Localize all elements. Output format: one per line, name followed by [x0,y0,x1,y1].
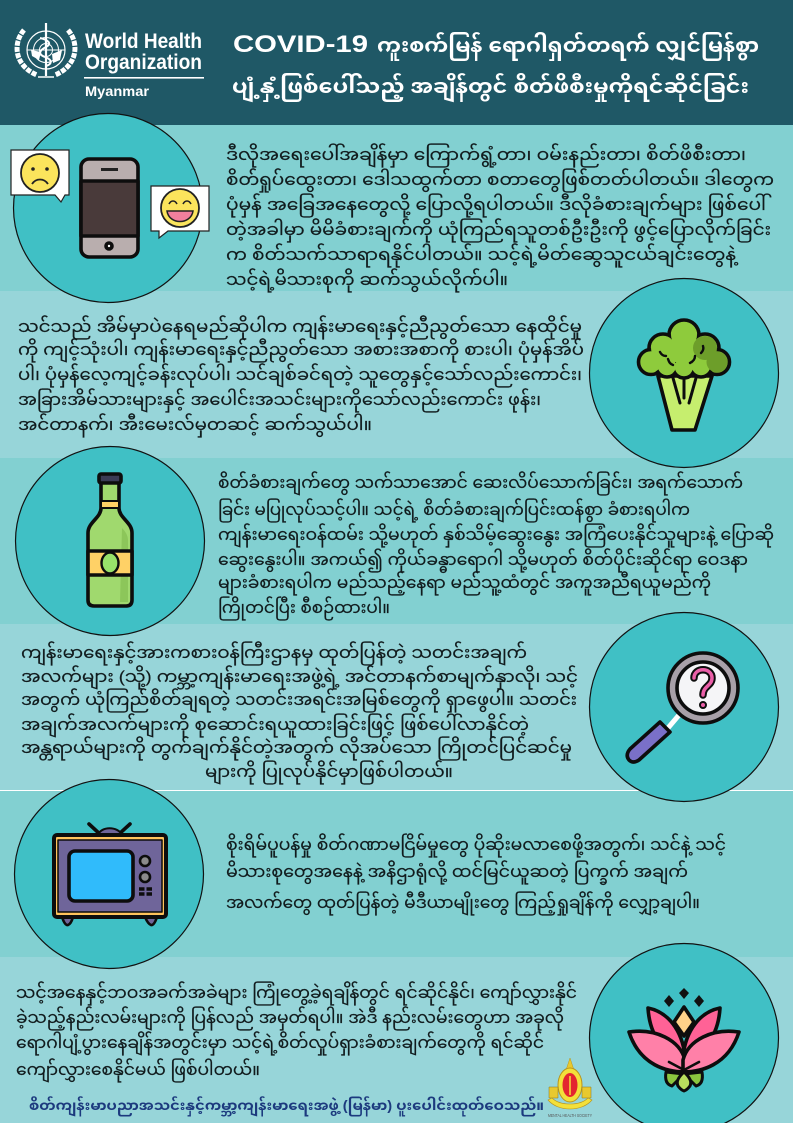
text block: များခံစားရပါက မည်သည့်နေရာ မည်သူ့ထံတွင် အကူအညီရယူမည်ကို [218,571,711,597]
text block [226,833,726,917]
title [232,31,759,103]
icon: television [54,824,166,925]
circle [14,780,204,968]
panel: reliable information [590,612,778,802]
text block: ကျန်းမာရေးနှင့်အားကစားဝန်ကြီးဌာနမှ ထုတ်ပြန်တဲ့ သတင်းအချက် [21,641,527,667]
text block: အခြားအိမ်သားများနှင့် အပေါင်းအသင်းများကိုသော်လည်းကောင်း ဖုန်း၊ [18,388,541,414]
icon: happy speech bubble [151,186,209,238]
text block: အလက်များ (သို့) ကမ္ဘာ့ကျန်းမာရေးအဖွဲ့ရဲ့ အင်တာနက်စာမျက်နှာလို၊ သင့် [21,665,578,691]
panel: healthy lifestyle [18,278,778,468]
icon: smartphone [81,159,138,257]
circle [590,278,778,468]
text block: ခဲ့သည့်နည်းလမ်းများကို ပြန်လည် အမှတ်ရပါ။ အဲဒီ နည်းလမ်းတွေဟာ အခုလို [16,1006,564,1032]
icon: Mental Health Society crest [548,1058,592,1118]
text block: တဲ့အခါမှာ မိမိခံစားချက်ကို ယုံကြည်ရသူတစ်ဦးဦးကို ဖွင့်ပြောလိုက်ခြင်း [226,218,771,244]
logo text: World Health Organization: Myanmar [85,83,150,99]
text block: အချက်အလက်များကို စုဆောင်းရယူထားခြင်းဖြင့် ဖြစ်ပေါ်လာနိုင်တဲ့ [21,713,529,739]
text block: ရောဂါပျံ့ပွားနေချိန်အတွင်းမှာ သင့်ရဲ့စိတ်လှုပ်ရှားခံစားချက်တွေကို ရင်ဆိုင် [16,1031,544,1057]
icon: sad speech bubble [11,150,69,202]
text block: ပါ၊ ပုံမှန်လေ့ကျင့်ခန်းလုပ်ပါ၊ သင်ချစ်ခင်ရတဲ့ သူတွေနှင့်သော်လည်းကောင်း၊ [18,363,582,389]
text block: ကြိုတင်ပြီး စီစဉ်ထားပါ။ [218,596,390,621]
title: COVID-19 [233,31,368,58]
text block: ပုံမှန် အခြေအနေတွေလို့ ပြောလို့ရပါတယ်။ ဒီလိုခံစားချက်များ ဖြစ်ပေါ် [226,193,771,219]
text block: စိုးရိမ်ပူပန်မှု စိတ်ဂဏာမငြိမ်မှုတွေ ပိုဆိုးမလာစေဖို့အတွက်၊ သင်နဲ့ သင့် [226,833,726,859]
title: ပျံ့နှံ့ဖြစ်ပေါ်သည့် အချိန်တွင် စိတ်ဖိစီးမှုကိုရင်ဆိုင်ခြင်း [232,73,749,103]
text block: သင့်ရဲ့မိသားစုကို ဆက်သွယ်လိုက်ပါ။ [226,268,508,294]
circle [14,114,202,302]
icon: lotus [629,988,739,1091]
icon: Mental Health Society crest: MENTAL HEALTH SOCIETY [548,1113,592,1118]
text block: မိသားစုတွေအနေနဲ့ အနိဌာရုံလို့ ထင်မြင်ယူဆတဲ့ ပြက္ခက် အချက် [226,860,688,886]
text block: က စိတ်သက်သာရာရနိုင်ပါတယ်။ သင့်ရဲ့မိတ်ဆွေသူငယ်ချင်းတွေနဲ့ [226,243,739,269]
text block: ဒီလိုအရေးပေါ်အချိန်မှာ ကြောက်ရွံ့တာ၊ ဝမ်းနည်းတာ၊ စိတ်ဖိစီးတာ၊ [226,143,746,169]
text block: ခြင်း မပြုလုပ်သင့်ပါ။ သင့်ရဲ့ စိတ်ခံစားချက်ပြင်းထန်စွာ ခံစားရပါက [218,498,690,524]
circle [590,612,778,802]
text block: ကို ကျင့်သုံးပါ၊ ကျန်းမာရေးနှင့်ညီညွတ်သော အစားအစာကို စားပါ၊ ပုံမှန်အိပ် [18,338,584,364]
text block: ကျန်းမာရေးဝန်ထမ်း သို့မဟုတ် နှစ်သိမ့်ဆွေးနွေး အကြံပေးနိုင်သူများနဲ့ ပြောဆို [218,523,774,549]
text block: အန္တရာယ်များကို တွက်ချက်နိုင်တဲ့အတွက် လိုအပ်သော ကြိုတင်ပြင်ဆင်မှု [21,736,572,762]
header banner [0,0,793,125]
panel: stay connected [11,114,774,302]
text block: ကျော်လွှားစေနိုင်မယ် ဖြစ်ပါတယ်။ [16,1058,260,1084]
panel: limit media [14,780,726,968]
title: ကူးစက်မြန် ရောဂါရှတ်တရက် လျှင်မြန်စွာ [377,32,759,61]
icon: magnifying glass [627,653,738,762]
text block: အလက်တွေ ထုတ်ပြန်တဲ့ မီဒီယာမျိုးတွေ ကြည့်ရှုချိန်ကို လျှော့ချပါ။ [226,891,700,917]
logo text: World Health Organization: World Health [85,30,202,53]
text block: သင့်အနေနှင့်ဘဝအခက်အခဲများ ကြုံတွေ့ခဲ့ရချိန်တွင် ရင်ဆိုင်နိုင်၊ ကျော်လွှားနိုင် [16,981,577,1007]
text block [226,143,774,294]
text block: စိတ်ရှုပ်ထွေးတာ၊ ဒေါသထွက်တာ စတာတွေဖြစ်တတ်ပါတယ်။ ဒါတွေက [226,168,774,193]
icon: broccoli [638,320,730,430]
text block [16,981,577,1084]
icon: bottle [88,474,132,606]
text block [21,641,578,786]
text block [18,315,584,439]
text block: ဆွေးနွေးပါ။ အကယ်၍ ကိုယ်ခန္ဓာရောဂါ သို့မဟုတ် စိတ်ပိုင်းဆိုင်ရာ ဝေဒနာ [218,548,748,574]
logo text: World Health Organization [84,30,204,99]
panel: avoid smoking and alcohol [16,446,774,636]
text block: သင်သည် အိမ်မှာပဲနေရမည်ဆိုပါက ကျန်းမာရေးနှင့်ညီညွတ်သော နေထိုင်မှု [18,315,582,341]
circle [16,446,204,636]
circle [590,944,778,1123]
icon: WHO emblem [17,23,75,77]
text block: စိတ်ခံစားချက်တွေ သက်သာအောင် ဆေးလိပ်သောက်ခြင်း၊ အရက်သောက် [218,471,743,496]
text block: အတွက် ယုံကြည်စိတ်ချရတဲ့ သတင်းအရင်းအမြစ်တွေကို ရှာဖွေပါ။ သတင်း [21,688,577,714]
text block: များကို ပြုလုပ်နိုင်မှာဖြစ်ပါတယ်။ [205,760,453,786]
text block [218,471,774,621]
logo text: World Health Organization: Organization [85,51,202,74]
text block: အင်တာနက်၊ အီးမေးလ်မှတဆင့် ဆက်သွယ်ပါ။ [18,413,372,439]
footer credit: စိတ်ကျန်းမာပညာအသင်းနှင့်ကမ္ဘာ့ကျန်းမာရေးအဖွဲ့ (မြန်မာ) ပူးပေါင်းထုတ်ဝေသည်။ [29,1095,544,1117]
panel: coping skills [590,944,778,1123]
